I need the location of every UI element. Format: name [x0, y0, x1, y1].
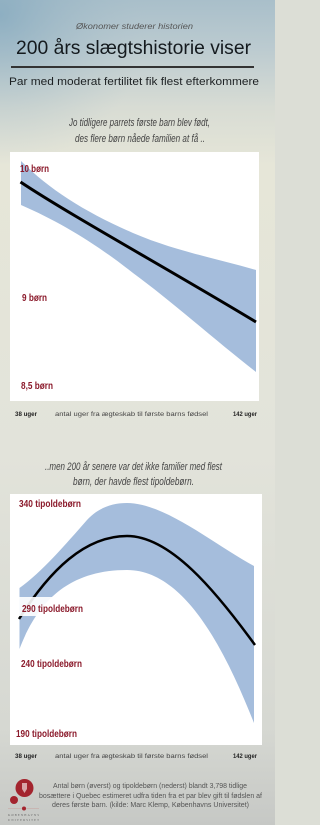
confidence band: great-grandchildren	[20, 503, 254, 723]
label backing	[19, 597, 53, 616]
title: 200 års slægtshistorie viser	[16, 37, 251, 59]
panel: chart great-grandchildren	[10, 494, 262, 745]
intro text for chart 1: des flere børn nåede familien at få ..	[75, 133, 205, 145]
title rule	[11, 66, 254, 68]
kicker: Økonomer studerer historien	[75, 21, 193, 31]
intro text for chart 2: børn, der havde flest tipoldebørn.	[73, 476, 194, 488]
x axis: chart 2: antal uger fra ægteskab til første barns fødsel	[55, 753, 209, 760]
y labels: children: 10 børn	[20, 164, 49, 175]
trend line: great-grandchildren	[19, 536, 255, 645]
panel: chart children	[10, 152, 259, 401]
trend line: children	[20, 182, 256, 322]
footnote: Antal børn (øverst) og tipoldebørn (nederst) blandt 3,798 tidlige	[53, 783, 247, 790]
y labels: children: 8,5 børn	[21, 381, 53, 392]
footnote	[39, 783, 262, 809]
intro text for chart 1	[68, 117, 210, 145]
x axis: chart 1	[15, 411, 257, 418]
x axis: chart 1: 142 uger	[233, 411, 257, 418]
y labels: great-grandchildren: 190 tipoldebørn	[16, 729, 77, 740]
y labels: great-grandchildren	[16, 499, 83, 740]
confidence band: children	[21, 161, 256, 372]
y labels: great-grandchildren: 290 tipoldebørn	[22, 604, 83, 615]
x axis: chart 2: 38 uger	[15, 753, 37, 760]
x axis: chart 1: 38 uger	[15, 411, 37, 418]
icon: university logo: KØBENHAVNS	[8, 813, 39, 817]
x axis: chart 2: 142 uger	[233, 753, 257, 760]
y labels: great-grandchildren: 240 tipoldebørn	[21, 659, 82, 670]
y labels: great-grandchildren: 340 tipoldebørn	[19, 499, 81, 510]
subtitle: Par med moderat fertilitet fik flest efterkommere	[9, 76, 259, 88]
x axis: chart 1: antal uger fra ægteskab til første barns fødsel	[55, 411, 209, 418]
footnote: bosættere i Quebec estimeret udfra tiden fra et par blev gift til fødslen af	[39, 793, 262, 800]
y labels: children: 9 børn	[22, 293, 47, 304]
intro text for chart 2	[45, 461, 223, 488]
intro text for chart 1: Jo tidligere parrets første barn blev født,	[68, 117, 210, 129]
icon: university logo	[8, 779, 39, 822]
footnote: deres første barn. (kilde: Marc Klemp, Københavns Universitet)	[52, 802, 249, 809]
y labels: children	[20, 164, 53, 392]
icon: university logo: UNIVERSITET	[8, 818, 39, 822]
x axis: chart 2	[15, 753, 257, 760]
